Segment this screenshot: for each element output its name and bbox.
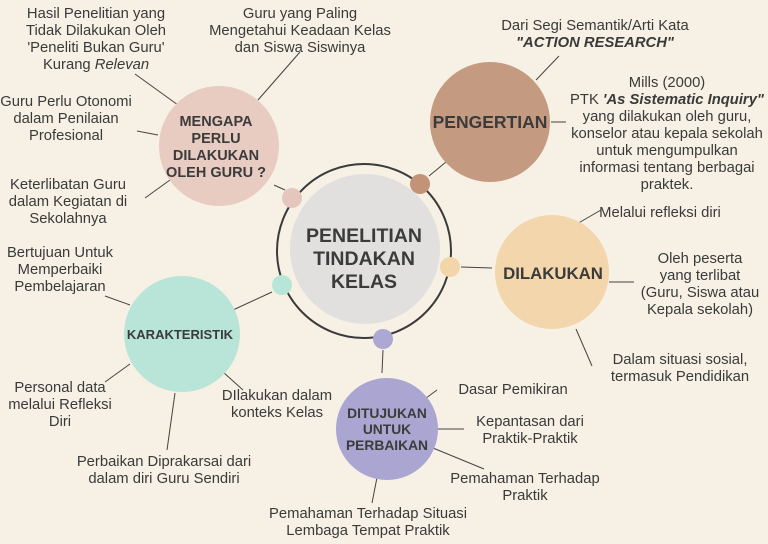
text: karakteristik notes: Pembelajaran	[14, 279, 106, 295]
text: pengertian notes: untuk mengumpulkan	[596, 143, 738, 159]
text: dilakukan notes: Melalui refleksi diri	[599, 205, 721, 221]
text: pengertian notes: Dari Segi Semantik/Arti Kata	[501, 18, 690, 34]
text: dilakukan notes: Oleh peserta	[658, 251, 743, 267]
text: mengapa notes: dalam Penilaian	[13, 111, 119, 127]
panel: dilakukan	[495, 215, 609, 329]
panel: mengapa: DILAKUKAN	[173, 148, 259, 164]
text: mengapa notes: Mengetahui Keadaan Kelas	[209, 23, 391, 39]
text: karakteristik notes: Memperbaiki	[18, 262, 102, 278]
panel: karakteristik: KARAKTERISTIK	[127, 327, 234, 342]
panel: ditujukan	[336, 378, 438, 480]
text: mengapa notes: Kurang Relevan	[43, 57, 149, 73]
text: mengapa notes: Sekolahnya	[29, 211, 107, 227]
text: karakteristik notes: Bertujuan Untuk	[7, 245, 114, 261]
text: ditujukan notes: Pemahaman Terhadap	[450, 471, 600, 487]
panel: mengapa: OLEH GURU ?	[166, 165, 266, 181]
text: ditujukan notes: Lembaga Tempat Praktik	[286, 523, 450, 539]
panel: mengapa: MENGAPA	[179, 114, 253, 130]
panel: mengapa: PERLU	[191, 131, 241, 147]
panel: dilakukan: DILAKUKAN	[503, 264, 603, 283]
text: pengertian notes: Mills (2000)	[629, 75, 705, 91]
panel: ditujukan: UNTUK	[363, 422, 411, 437]
text: mengapa notes: dan Siswa Siswinya	[235, 40, 366, 56]
panel: karakteristik	[124, 276, 240, 392]
text: mengapa notes: Profesional	[29, 128, 103, 144]
panel: pengertian	[430, 62, 550, 182]
center circle: KELAS	[331, 271, 397, 293]
text: karakteristik notes: Perbaikan Diprakarsai dari	[77, 454, 251, 470]
text: mengapa notes: 'Peneliti Bukan Guru'	[27, 40, 165, 56]
panel: pengertian: PENGERTIAN	[433, 112, 547, 132]
connector dots	[272, 174, 460, 349]
text: pengertian notes: "ACTION RESEARCH"	[516, 35, 675, 51]
text: pengertian notes: yang dilakukan oleh guru,	[583, 109, 751, 125]
center circle	[290, 174, 440, 324]
text: mengapa notes: Hasil Penelitian yang	[27, 6, 165, 22]
center circle: PENELITIAN	[306, 225, 422, 247]
text: dilakukan notes: termasuk Pendidikan	[611, 369, 749, 385]
text: ditujukan notes: Praktik	[502, 488, 548, 504]
text: ditujukan notes: Kepantasan dari	[476, 414, 584, 430]
text: karakteristik notes	[7, 245, 332, 487]
panel: ditujukan: DITUJUKAN	[347, 406, 427, 421]
center circle: TINDAKAN	[313, 248, 415, 270]
text: mengapa notes: Guru Perlu Otonomi	[0, 94, 132, 110]
text: pengertian notes: PTK 'As Sistematic Inquiry"	[570, 92, 765, 108]
text: mengapa notes: Tidak Dilakukan Oleh	[26, 23, 166, 39]
text: karakteristik notes: Personal data	[14, 380, 106, 396]
center ring	[277, 164, 451, 338]
text: dilakukan notes: yang terlibat	[660, 268, 740, 284]
panel: ditujukan: PERBAIKAN	[346, 438, 428, 453]
text: mengapa notes: Guru yang Paling	[243, 6, 357, 22]
text: karakteristik notes: dalam diri Guru Sendiri	[88, 471, 240, 487]
text: dilakukan notes: Dalam situasi sosial,	[613, 352, 747, 368]
text: pengertian notes: praktek.	[641, 177, 693, 193]
text: mengapa notes: dalam Kegiatan di	[9, 194, 127, 210]
text: ditujukan notes: Dasar Pemikiran	[458, 382, 568, 398]
text: dilakukan notes	[599, 205, 759, 385]
text: karakteristik notes: Diri	[49, 414, 71, 430]
text: ditujukan notes	[269, 382, 600, 539]
text: pengertian notes	[501, 18, 765, 193]
text: pengertian notes: informasi tentang berbagai	[579, 160, 755, 176]
text: karakteristik notes: konteks Kelas	[231, 405, 323, 421]
panel: mengapa	[159, 86, 279, 206]
text: ditujukan notes: Pemahaman Terhadap Situasi	[269, 506, 467, 522]
text: karakteristik notes: DIlakukan dalam	[222, 388, 332, 404]
text: ditujukan notes: Praktik-Praktik	[482, 431, 578, 447]
text: dilakukan notes: (Guru, Siswa atau	[641, 285, 759, 301]
text: dilakukan notes: Kepala sekolah)	[647, 302, 753, 318]
text: pengertian notes: konselor atau kepala sekolah	[571, 126, 763, 142]
text: mengapa notes	[0, 6, 391, 227]
text: mengapa notes: Keterlibatan Guru	[10, 177, 126, 193]
text: karakteristik notes: melalui Refleksi	[8, 397, 112, 413]
